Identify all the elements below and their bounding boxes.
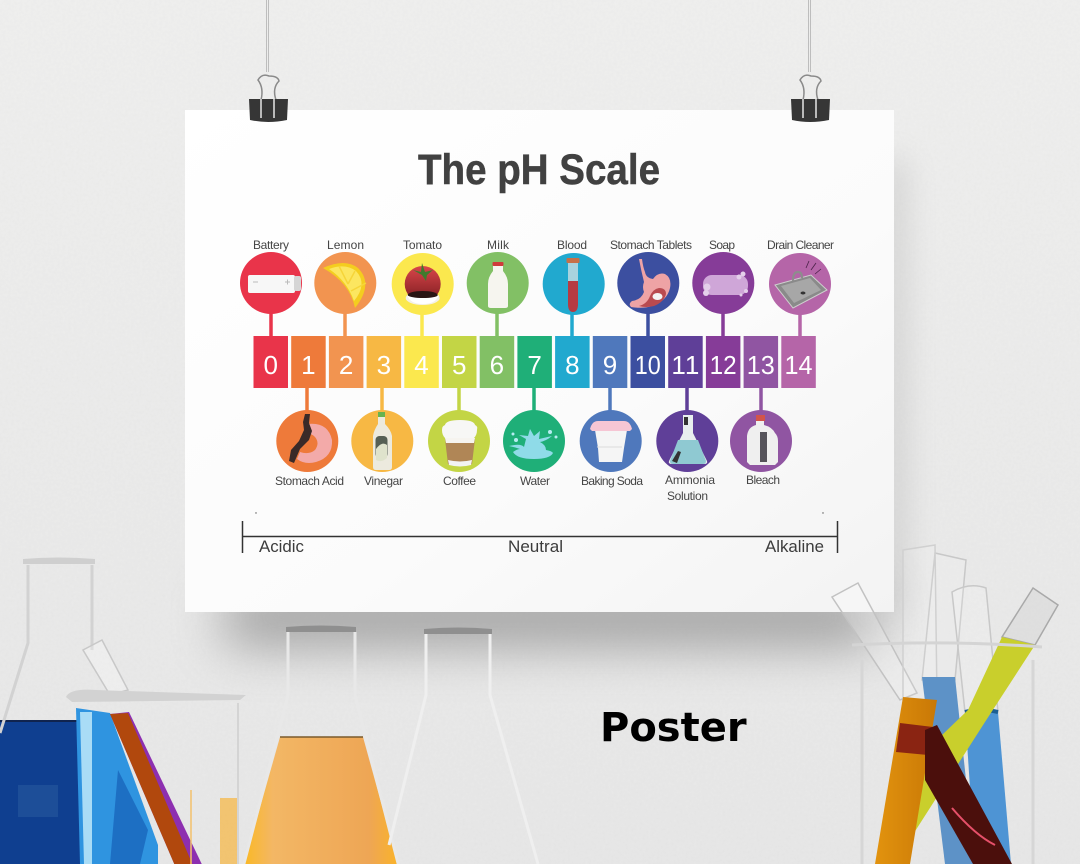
item: Baking Soda, pH 9: Baking Soda <box>581 474 643 488</box>
item: Blood, pH 8 <box>543 238 605 315</box>
illustration: beaker with tilted tube <box>66 640 246 864</box>
acidity range bar <box>242 512 838 556</box>
caption: Poster: Poster <box>600 705 747 751</box>
item: Bleach, pH 13: Bleach <box>746 473 780 487</box>
item: Water, pH 7: Water <box>520 474 550 488</box>
pH scale blocks: 3 <box>377 350 391 380</box>
pH scale blocks: 1 <box>301 350 316 380</box>
item: Battery, pH 0: Battery <box>253 238 289 252</box>
item: Bleach, pH 13 <box>730 410 792 487</box>
illustration: blue flask <box>0 558 95 864</box>
item: Coffee, pH 5 <box>428 410 490 488</box>
pH scale blocks <box>254 336 816 388</box>
item: Milk, pH 6: Milk <box>487 238 510 252</box>
item: Drain Cleaner, pH 14 <box>767 238 834 315</box>
item: Stomach Tablets, pH 10 <box>610 238 692 314</box>
item: Baking Soda, pH 9 <box>580 410 643 488</box>
item: Lemon, pH 2: Lemon <box>327 238 364 252</box>
item: Stomach Tablets, pH 10: Stomach Tablets <box>610 238 692 252</box>
item: Drain Cleaner, pH 14: Drain Cleaner <box>767 238 834 252</box>
pH scale blocks: 13 <box>747 350 775 380</box>
pH scale blocks: 2 <box>339 350 353 380</box>
illustration: beaker of test tubes <box>832 545 1058 864</box>
binder clip right <box>791 0 830 122</box>
pH scale blocks: 9 <box>603 350 617 380</box>
pH scale blocks: 12 <box>710 350 737 380</box>
title: The pH Scale <box>418 146 660 194</box>
pH scale blocks: 6 <box>490 350 504 380</box>
acidity range bar: Alkaline <box>765 537 824 556</box>
illustration: amber flask <box>241 626 401 864</box>
illustration: clear flask <box>389 628 538 864</box>
item: Vinegar, pH 3 <box>351 410 413 488</box>
pH scale blocks: 14 <box>784 350 812 380</box>
item: Ammonia Solution, pH 11: Solution <box>667 489 708 503</box>
item: Ammonia Solution, pH 11: Ammonia <box>665 473 715 487</box>
acidity range bar: Neutral <box>508 537 563 556</box>
pH scale blocks: 5 <box>452 350 466 380</box>
item: Soap, pH 12: Soap <box>709 238 735 252</box>
item: Water, pH 7 <box>503 410 565 488</box>
item: Coffee, pH 5: Coffee <box>443 474 476 488</box>
item: Battery, pH 0 <box>240 238 302 314</box>
pH scale blocks: 10 <box>635 350 661 380</box>
item: Tomato, pH 4 <box>392 238 454 315</box>
item: Blood, pH 8: Blood <box>557 238 587 252</box>
item: Ammonia Solution, pH 11 <box>656 410 718 503</box>
item: Soap, pH 12 <box>692 238 754 314</box>
item: Tomato, pH 4: Tomato <box>403 238 442 252</box>
item: Lemon, pH 2 <box>314 238 376 314</box>
pH scale blocks: 4 <box>414 350 429 380</box>
acidity range bar: Acidic <box>259 537 304 556</box>
panel: poster <box>185 110 894 612</box>
binder clip left <box>249 0 288 122</box>
item: Vinegar, pH 3: Vinegar <box>364 474 403 488</box>
pH scale blocks: 11 <box>671 350 699 380</box>
pH scale blocks: 8 <box>565 350 580 380</box>
pH scale blocks: 7 <box>527 350 542 380</box>
connector lines <box>271 310 800 415</box>
pH scale blocks: 0 <box>263 350 278 380</box>
item: Stomach Acid, pH 1 <box>275 410 344 488</box>
item: Stomach Acid, pH 1: Stomach Acid <box>275 474 344 488</box>
item: Milk, pH 6 <box>467 238 529 314</box>
